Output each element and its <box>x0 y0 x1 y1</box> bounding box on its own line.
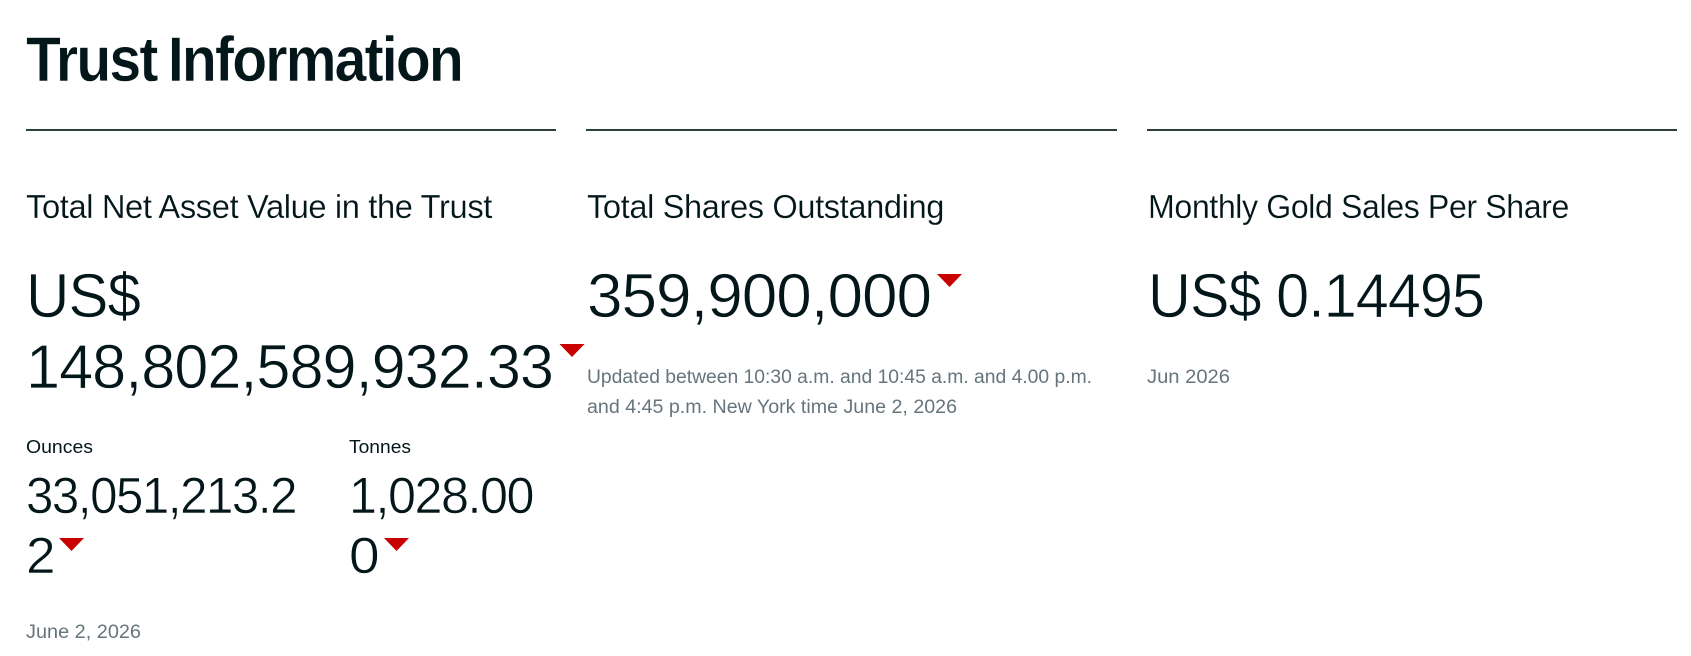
value: net asset value: US$ <box>26 262 141 331</box>
label: tonnes: Tonnes <box>349 436 411 457</box>
panel: monthly gold sales per share <box>1147 189 1569 388</box>
value: net asset value: 148,802,589,932.33 <box>26 333 553 402</box>
value: ounces: 33,051,213.2 <box>26 467 296 524</box>
value: shares outstanding: 359,900,000 <box>587 262 931 331</box>
value: monthly gold sales: US$ 0.14495 <box>1148 262 1484 331</box>
update note <box>587 367 1092 418</box>
date note: monthly gold sales: Jun 2026 <box>1147 367 1230 388</box>
panel: total net asset value <box>26 189 584 643</box>
value: tonnes <box>349 467 533 584</box>
update note: Updated between 10:30 a.m. and 10:45 a.m. and 4.00 p.m. <box>587 367 1092 388</box>
value: net asset value <box>26 262 553 402</box>
icon: down triangle net asset value <box>560 344 584 357</box>
title: Trust Information <box>26 25 462 95</box>
icon: down triangle ounces <box>59 538 84 551</box>
value: ounces: 2 <box>26 527 54 584</box>
panel: total shares outstanding <box>587 189 1092 418</box>
icon: down triangle shares <box>937 274 962 287</box>
label: ounces: Ounces <box>26 436 93 457</box>
date note: net asset value: June 2, 2026 <box>26 622 141 643</box>
value: tonnes: 1,028.00 <box>349 467 533 524</box>
heading: monthly gold sales per share: Monthly Gold Sales Per Share <box>1148 189 1569 226</box>
heading: total shares outstanding: Total Shares Outstanding <box>587 189 944 226</box>
value: tonnes: 0 <box>349 527 378 584</box>
icon: down triangle tonnes <box>384 538 409 551</box>
heading: total net asset value: Total Net Asset Value in the Trust <box>26 189 493 226</box>
value: ounces <box>26 467 296 584</box>
update note: and 4:45 p.m. New York time June 2, 2026 <box>587 397 957 418</box>
